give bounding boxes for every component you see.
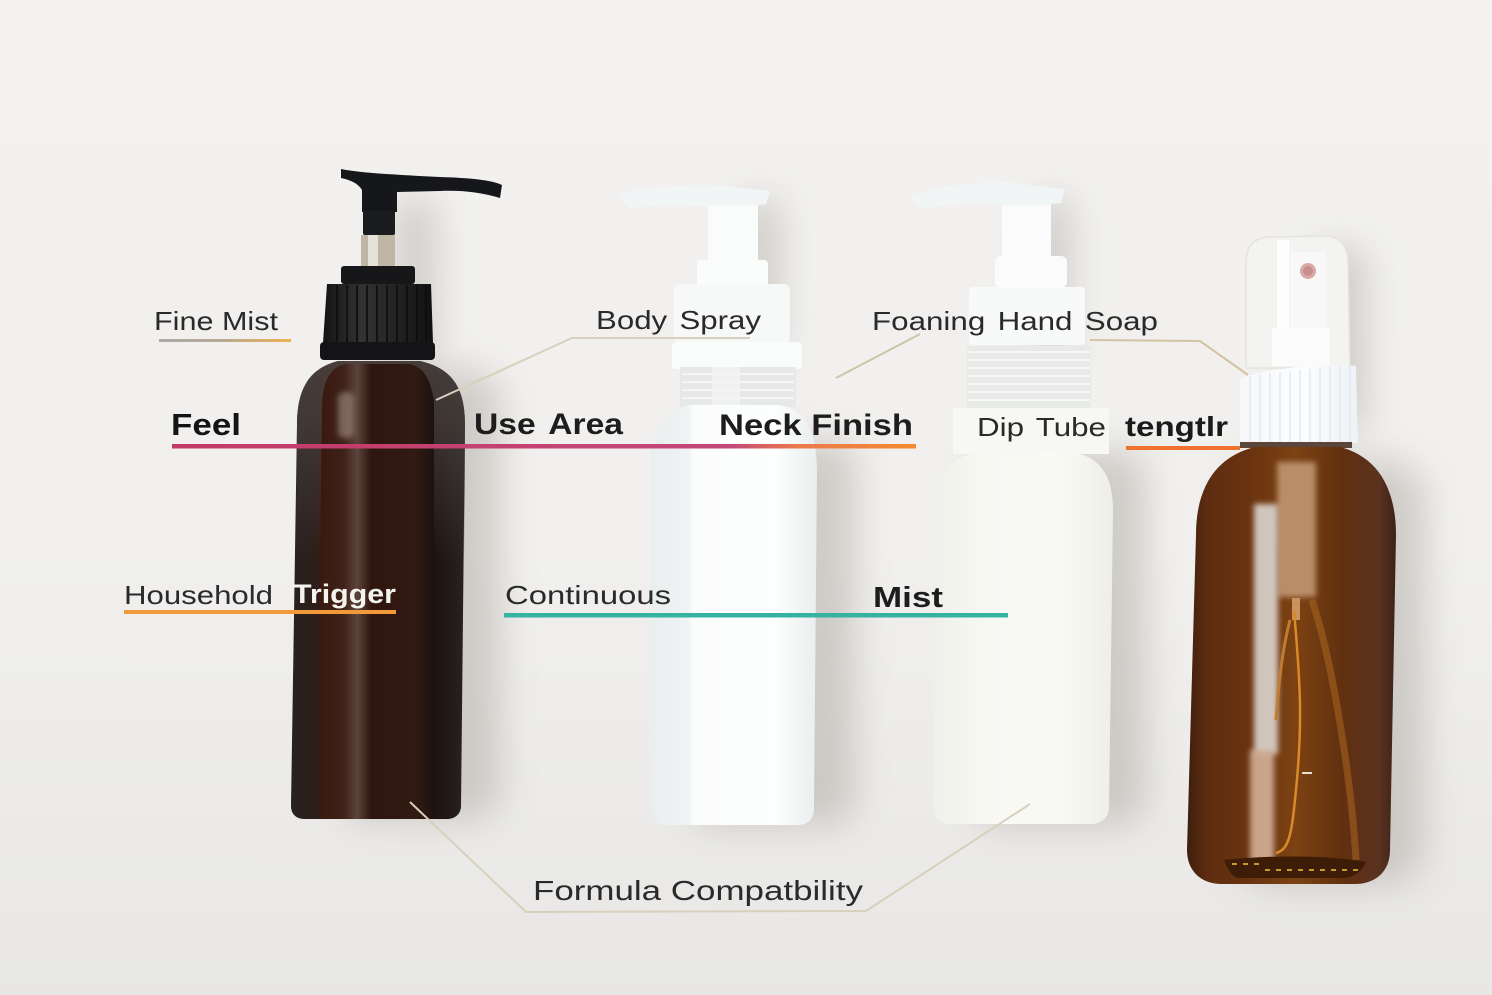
label: formula compatibility: Formula Compatbility [533,875,863,906]
label: trigger: Trigger [293,579,397,609]
label: feel: Feel [171,407,241,442]
clear neck [680,367,796,407]
clear overcap [1246,236,1350,368]
label: body spray: Body Spray [596,305,761,335]
cream pump head [910,183,1065,258]
neck ring [1240,442,1352,448]
clear ribbed neck [967,346,1091,408]
leader lines [410,334,1248,912]
white pump head [618,185,770,262]
label: fine mist: Fine Mist [154,306,279,336]
leader: body spray [436,338,750,400]
icon: dark pump head [341,169,502,212]
label: dip tube: Dip Tube [977,412,1106,442]
leader: foaming soap right [1090,340,1248,375]
bottle: white pump [618,185,817,825]
underline: continuous mist [504,613,1008,618]
bottle shadows [340,200,1425,885]
label: mist: Mist [873,582,943,614]
dark ribbed cap [323,284,433,343]
label patch: dip tube [953,408,1109,454]
white body [650,405,817,825]
leader: foaming soap [836,334,920,378]
underline: household trigger [124,610,396,614]
amber body [1187,447,1396,884]
bottle: dark brown pump [291,169,502,819]
label: continuous: Continuous [505,580,671,610]
label: neck finish: Neck Finish [719,409,913,442]
dark body [291,361,465,819]
label: length: tengtlr [1125,411,1228,442]
label: household: Household [124,580,273,610]
cream body [933,452,1113,824]
label: use area: Use Area [474,408,623,441]
ribbed white collar [1240,365,1358,443]
white cap [674,284,790,344]
underline: feel to neck finish [172,444,916,448]
bottle: amber sprayer [1187,236,1396,884]
underline: length [1126,446,1240,450]
label: foaming hand soap: Foaning Hand Soap [872,306,1158,336]
underline: fine mist [159,339,291,342]
cream cap [969,287,1085,345]
inner tube glow [1277,462,1316,597]
leader: formula compatibility [410,802,1030,912]
bottle: cream pump [910,183,1113,824]
